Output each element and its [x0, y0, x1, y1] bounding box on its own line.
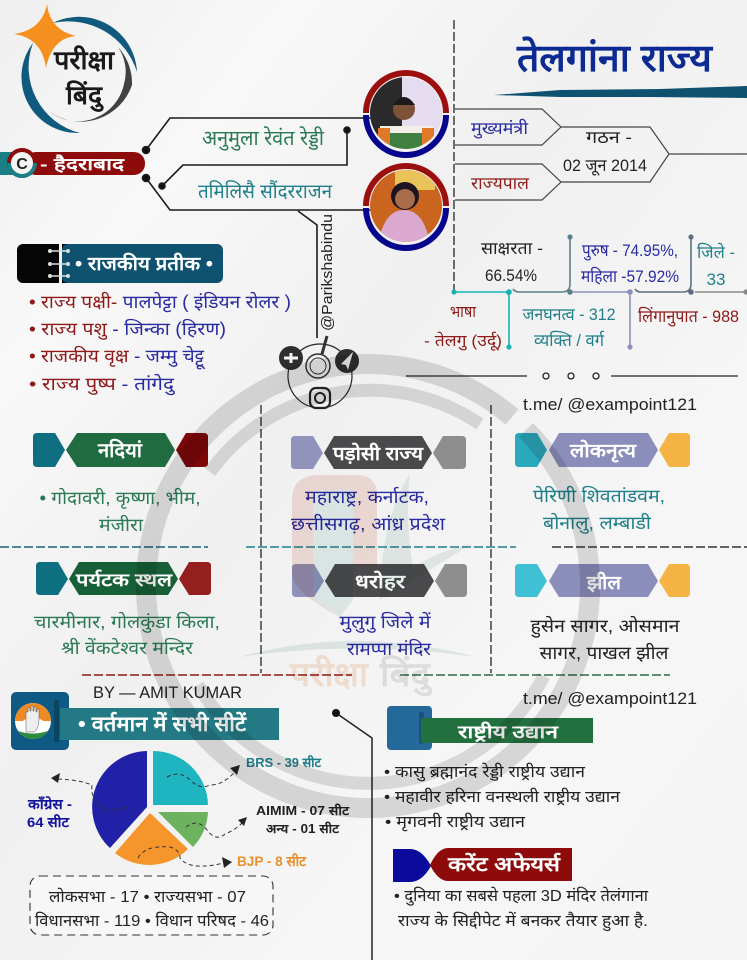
formation date tag	[561, 127, 747, 182]
logo	[14, 4, 137, 133]
logo: परीक्षा	[53, 45, 115, 75]
name: governor: तमिलिसै सौंदरराजन	[198, 180, 333, 203]
panel: heritage	[292, 564, 467, 659]
title: तेलगांना राज्य	[516, 36, 714, 80]
panel: lakes: हुसेन सागर, ओसमान	[530, 615, 681, 638]
pie label: congress: 64 सीट	[27, 814, 70, 830]
panel: folk dance: लोकनृत्य	[569, 439, 637, 463]
panel: heritage: मुलुगु जिले में	[340, 611, 432, 633]
panel: heritage: रामप्पा मंदिर	[347, 638, 432, 659]
state flower: • राज्य पुष्प - तांगेदु	[29, 373, 176, 396]
vertical dashed divider	[453, 20, 455, 292]
pie label: others: अन्य - 01 सीट	[266, 821, 340, 836]
panel: tourist places: पर्यटक स्थल	[75, 569, 173, 590]
panel: folk dance	[515, 433, 690, 534]
national parks list: • मृगवनी राष्ट्रीय उद्यान	[385, 812, 526, 832]
background watermark: परीक्षा	[289, 654, 369, 694]
pie label: congress: काँग्रेस -	[27, 796, 72, 812]
governor tag: राज्यपाल	[471, 174, 529, 193]
current affairs heading	[393, 848, 572, 882]
statistics timeline	[451, 234, 747, 350]
density	[522, 305, 616, 350]
symbols heading: • राजकीय प्रतीक •	[75, 252, 213, 275]
panel: tourist places: चारमीनार, गोलकुंडा किला,	[34, 611, 220, 633]
separator with circles	[406, 373, 738, 379]
state animal: • राज्य पशु - जिन्का (हिरण)	[29, 318, 226, 340]
symbols heading	[17, 244, 223, 283]
governor tag	[455, 164, 561, 200]
capital bar	[0, 148, 145, 178]
density: जनघनत्व - 312	[522, 305, 616, 324]
pie chart	[92, 751, 208, 865]
language	[424, 304, 502, 351]
seats heading	[11, 692, 279, 750]
literacy: साक्षरता -	[481, 239, 543, 258]
current affairs text	[394, 886, 649, 932]
capital bar: - हैदराबाद	[40, 154, 125, 174]
chief minister tag	[455, 109, 561, 145]
background watermark: बिंदु	[379, 654, 433, 697]
social icons	[279, 336, 359, 408]
male female literacy: पुरुष - 74.95%,	[582, 241, 678, 261]
portrait: chief minister	[366, 73, 446, 155]
panel: folk dance: बोनालु, लम्बाडी	[543, 512, 651, 534]
panel: rivers: मंजीरा	[99, 514, 143, 535]
districts	[697, 242, 735, 289]
national parks list	[384, 762, 621, 832]
districts: जिले -	[697, 242, 735, 262]
dashed arrows	[58, 768, 245, 866]
panel: heritage: धरोहर	[355, 570, 406, 593]
national parks list: • कासु ब्रह्मानंद रेड्डी राष्ट्रीय उद्यान	[384, 762, 586, 782]
grid dashed lines	[0, 405, 747, 675]
telegram handle top: t.me/ @exampoint121	[523, 395, 697, 414]
language: - तेलगु (उर्दू)	[424, 331, 502, 351]
panel: rivers	[33, 433, 208, 535]
current affairs text: • दुनिया का सबसे पहला 3D मंदिर तेलंगाना	[394, 886, 649, 906]
portrait: governor	[366, 166, 446, 248]
seats box: लोकसभा - 17 • राज्यसभा - 07	[49, 887, 246, 906]
state tree: • राजकीय वृक्ष - जम्मु चेट्टू	[29, 345, 206, 369]
language: भाषा	[450, 304, 477, 321]
social handle: @Parikshabindu	[319, 214, 336, 331]
panel: neighbouring states: पड़ोसी राज्य	[332, 442, 424, 465]
icon: congress hand	[15, 703, 51, 739]
symbols list	[29, 291, 291, 396]
panel: neighbouring states: महाराष्ट्र, कर्नाटक,	[305, 486, 429, 507]
logo: बिंदु	[65, 80, 104, 112]
sex ratio: लिंगानुपात - 988	[638, 306, 739, 327]
author credit: BY — AMIT KUMAR	[93, 683, 242, 702]
pie label: congress	[27, 796, 72, 830]
panel: tourist places	[34, 562, 220, 658]
formation date tag: 02 जून 2014	[563, 156, 647, 176]
title brush underline	[494, 86, 747, 98]
panel: neighbouring states: छत्तीसगढ़, आंध्र प्रदेश	[291, 513, 446, 534]
formation date tag: गठन -	[586, 128, 632, 147]
telegram handle bottom: t.me/ @exampoint121	[523, 689, 697, 708]
name: chief minister: अनुमुला रेवंत रेड्डी	[202, 126, 325, 151]
panel: lakes	[515, 564, 690, 663]
literacy	[481, 239, 543, 285]
national parks list: • महावीर हरिना वनस्थली राष्ट्रीय उद्यान	[384, 787, 621, 806]
literacy: 66.54%	[485, 266, 537, 285]
pie label: BRS: BRS - 39 सीट	[246, 755, 321, 770]
pie label: others	[256, 803, 350, 836]
chief minister tag: मुख्यमंत्री	[471, 118, 529, 139]
national parks heading	[387, 706, 593, 750]
seats box	[30, 876, 273, 935]
state bird: • राज्य पक्षी- पालपेट्टा ( इंडियन रोलर )	[29, 291, 291, 313]
connector line right	[332, 709, 372, 960]
background watermark	[146, 364, 590, 808]
seats box: विधानसभा - 119 • विधान परिषद - 46	[35, 911, 269, 930]
male female literacy: महिला -57.92%	[581, 266, 679, 286]
panel: rivers: • गोदावरी, कृष्णा, भीम,	[40, 487, 200, 509]
panel: neighbouring states	[291, 436, 466, 534]
pie label: others: AIMIM - 07 सीट	[256, 803, 350, 818]
districts: 33	[706, 270, 726, 289]
panel: tourist places: श्री वेंकटेश्वर मन्दिर	[61, 637, 194, 658]
current affairs text: राज्य के सिद्दीपेट में बनकर तैयार हुआ है.	[398, 911, 648, 932]
national parks heading: राष्ट्रीय उद्यान	[457, 721, 559, 743]
connector lines	[142, 118, 372, 338]
panel: lakes: सागर, पाखल झील	[540, 642, 669, 663]
arrow heads	[51, 765, 247, 868]
density: व्यक्ति / वर्ग	[534, 330, 605, 350]
panel: folk dance: पेरिणी शिवतांडवम,	[533, 485, 665, 506]
panel: rivers: नदियां	[97, 438, 143, 462]
current affairs heading: करेंट अफेयर्स	[447, 852, 562, 876]
panel: lakes: झील	[586, 571, 622, 594]
pie label: BJP: BJP - 8 सीट	[237, 853, 307, 869]
male female literacy	[581, 241, 679, 286]
capital bar: C	[16, 156, 28, 173]
seats heading: • वर्तमान में सभी सीटें	[78, 711, 247, 736]
